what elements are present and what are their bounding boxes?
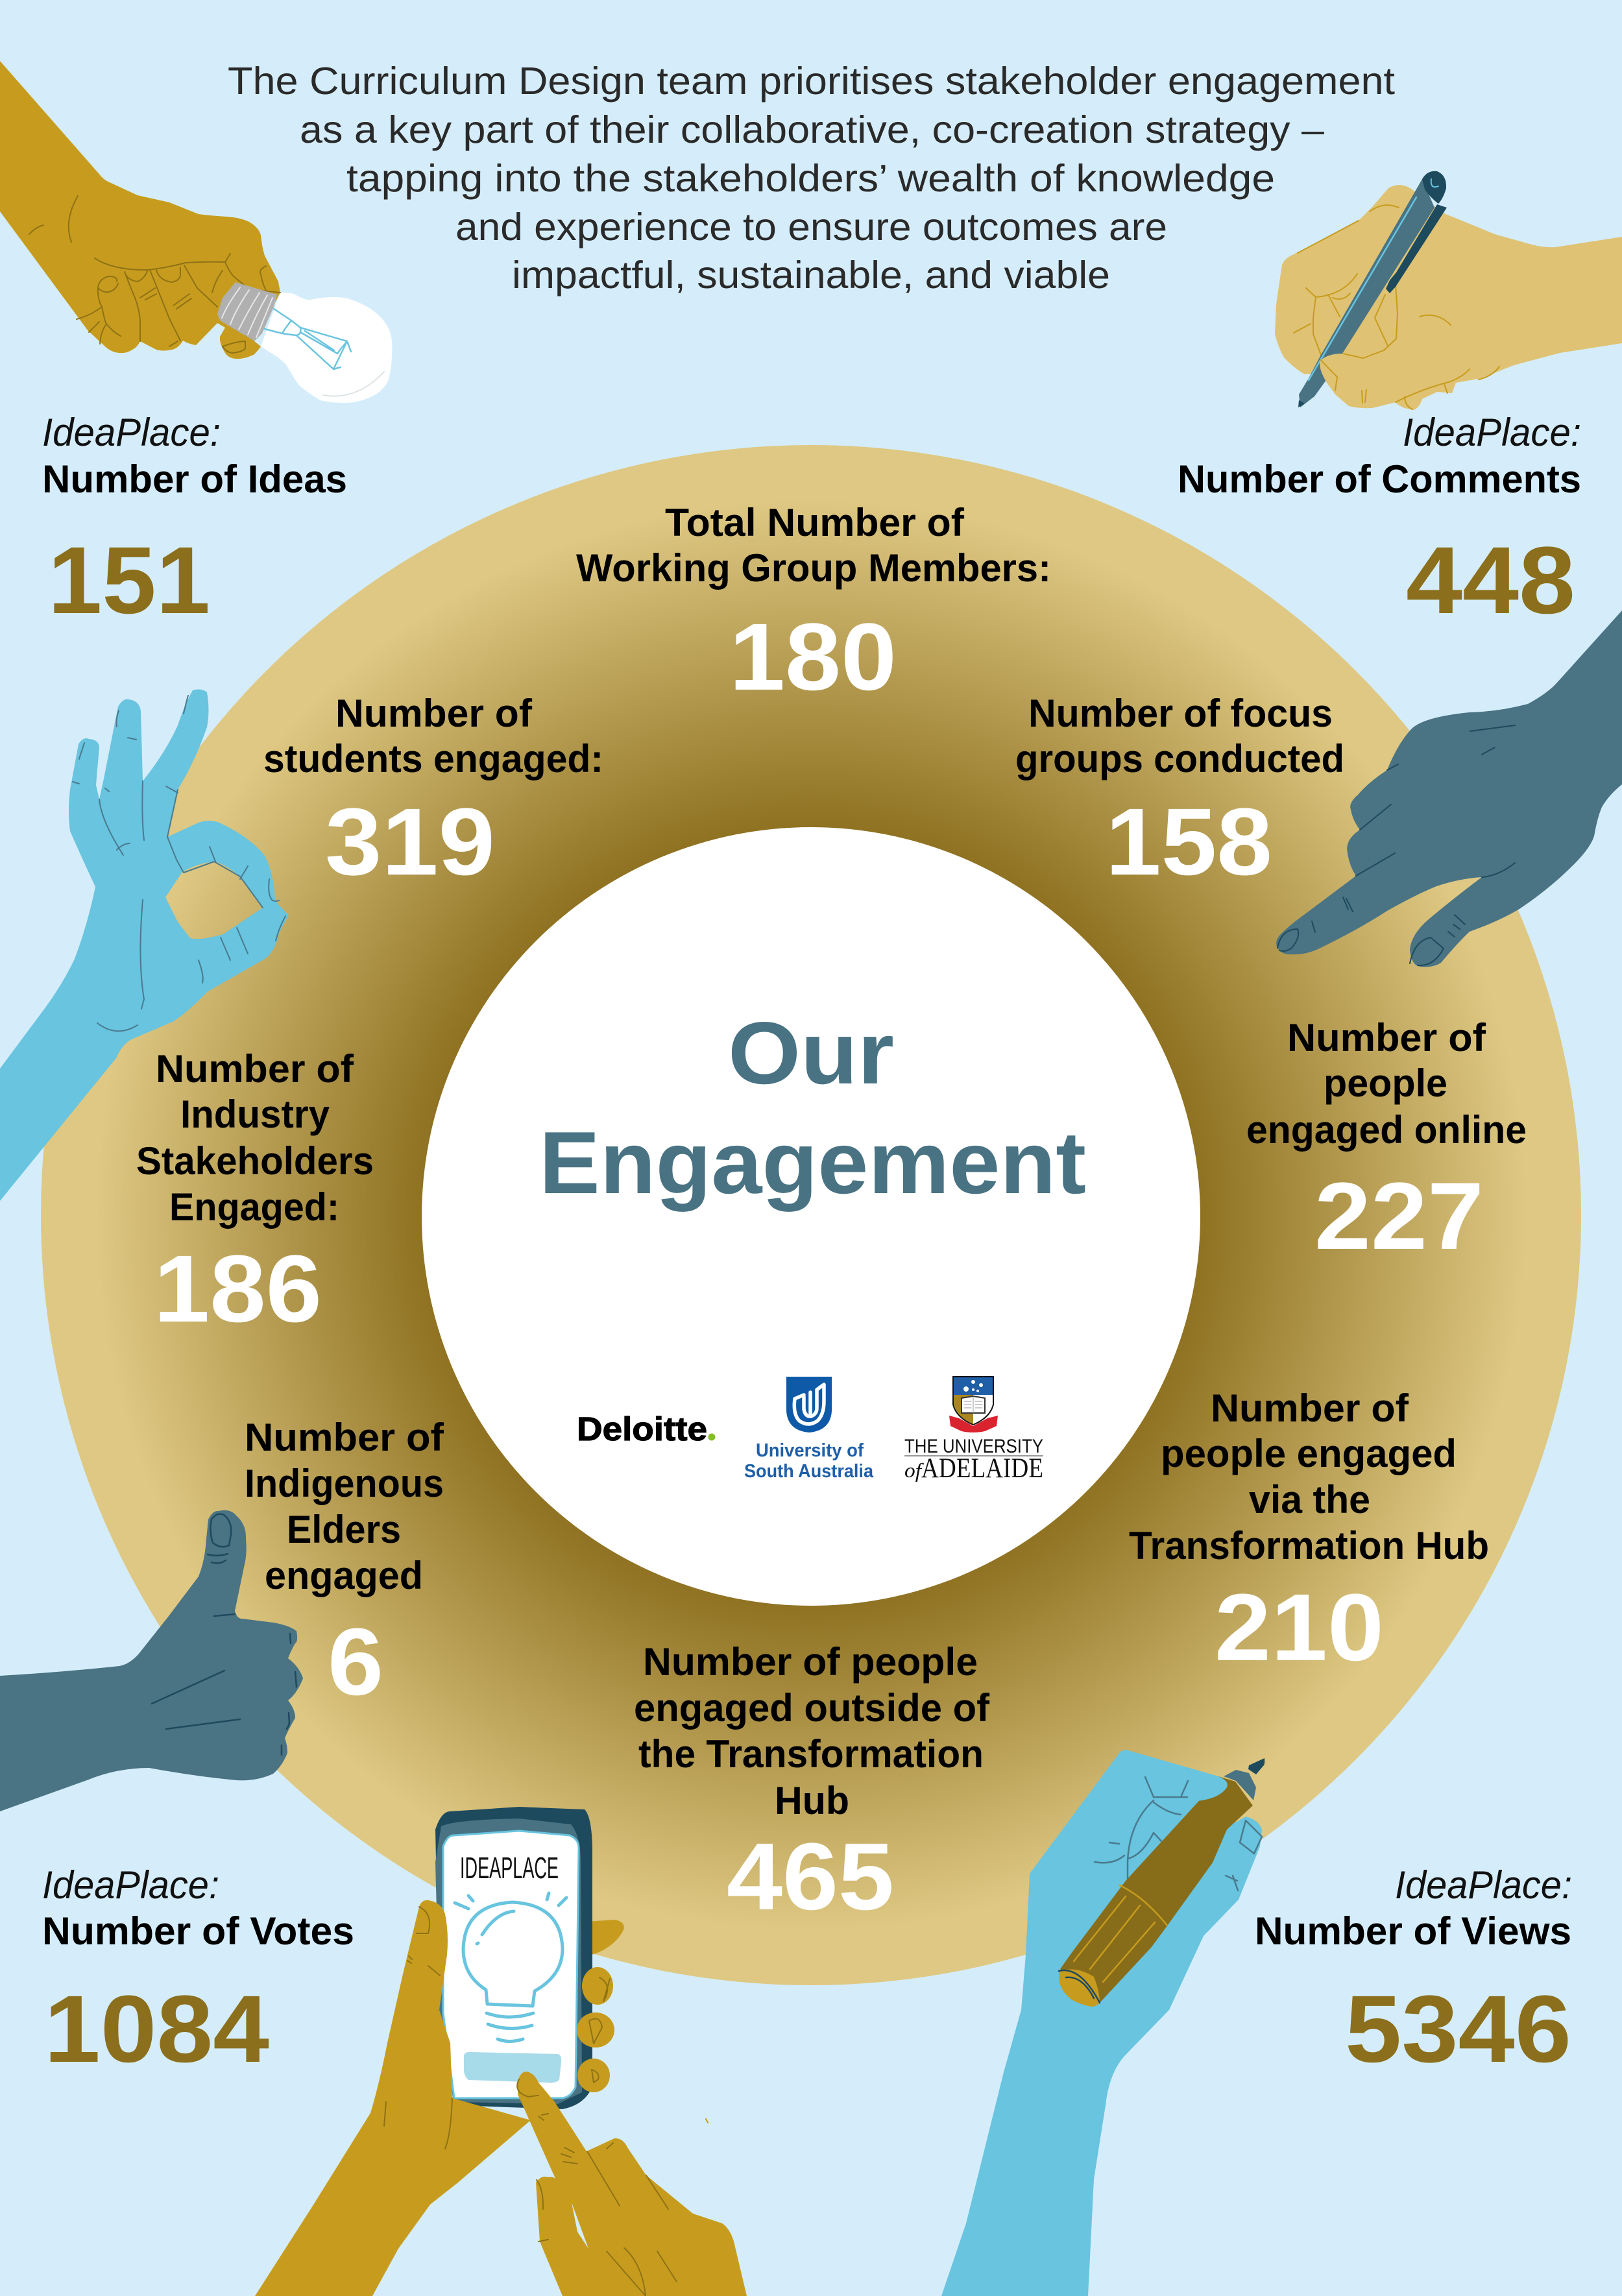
- intro text: [228, 60, 1395, 296]
- stat: IdeaPlace number of votes: IdeaPlace:: [42, 1863, 219, 1907]
- stat: Indigenous Elders: Number of: [245, 1416, 444, 1459]
- intro text: The Curriculum Design team prioritises stakeholder engagement: [228, 60, 1395, 103]
- stat: people engaged online: people: [1324, 1061, 1447, 1105]
- right hand: [518, 2072, 747, 2296]
- stat: industry stakeholders: [136, 1047, 374, 1342]
- stat: focus groups conducted: Number of focus: [1028, 692, 1333, 735]
- stat: IdeaPlace number of ideas: IdeaPlace:: [42, 411, 221, 454]
- logo: University of Adelaide: [904, 1377, 1043, 1484]
- stat: IdeaPlace number of ideas: 151: [48, 527, 210, 634]
- stat: working group members: Working Group Members:: [576, 546, 1051, 590]
- stat: people engaged online: engaged online: [1246, 1108, 1527, 1152]
- stat: students engaged: Number of: [335, 692, 533, 735]
- title: [539, 1004, 1086, 1212]
- stat: IdeaPlace number of views: IdeaPlace:: [1395, 1863, 1572, 1907]
- stat: industry stakeholders: Engaged:: [169, 1185, 339, 1229]
- stat: Transformation Hub: 210: [1215, 1575, 1384, 1681]
- stat: Transformation Hub: Transformation Hub: [1129, 1524, 1489, 1567]
- stat: IdeaPlace number of comments: [1178, 411, 1581, 634]
- intro text: and experience to ensure outcomes are: [455, 206, 1167, 248]
- logo: Deloitte: Deloitte: [577, 1410, 707, 1447]
- stat: industry stakeholders: 186: [154, 1236, 322, 1342]
- icon: blue hand holding marker: [941, 1750, 1265, 2296]
- icon: blue hand making OK sign: [0, 690, 289, 1201]
- stat: people engaged online: 227: [1314, 1163, 1484, 1270]
- stat: Indigenous Elders: Indigenous: [245, 1462, 444, 1505]
- stat: IdeaPlace number of comments: IdeaPlace:: [1403, 411, 1581, 454]
- stat: IdeaPlace number of comments: Number of Comments: [1178, 457, 1581, 501]
- bulb drawing: [455, 1893, 566, 2041]
- stat: outside Transformation Hub: [634, 1640, 990, 1930]
- stat: outside Transformation Hub: 465: [727, 1824, 894, 1930]
- app button: [464, 2052, 561, 2083]
- stat: working group members: [576, 501, 1051, 710]
- icon: gold hand holding light bulb: [0, 61, 392, 403]
- stat: students engaged: students engaged:: [263, 737, 603, 780]
- stat: IdeaPlace number of views: [1255, 1863, 1572, 2083]
- stat: Indigenous Elders: Elders: [287, 1508, 401, 1551]
- stat: industry stakeholders: Number of: [156, 1047, 354, 1091]
- stat: IdeaPlace number of ideas: Number of Ideas: [42, 457, 347, 501]
- stat: focus groups conducted: [1015, 692, 1344, 895]
- stat: focus groups conducted: 158: [1106, 789, 1272, 895]
- stat: working group members: 180: [729, 604, 897, 710]
- stat: IdeaPlace number of votes: 1084: [44, 1976, 269, 2083]
- stat: outside Transformation Hub: Number of people: [643, 1640, 978, 1684]
- stat: Transformation Hub: people engaged: [1161, 1432, 1457, 1475]
- phone screen: [443, 1831, 579, 2098]
- stat: focus groups conducted: groups conducted: [1015, 737, 1344, 780]
- stat: IdeaPlace number of views: 5346: [1345, 1976, 1571, 2083]
- stat: Indigenous Elders: 6: [328, 1609, 383, 1715]
- icon: dark teal thumbs up: [0, 1510, 303, 1811]
- intro text: tapping into the stakeholders’ wealth of knowledge: [346, 157, 1275, 200]
- icon: hands holding phone with IdeaPlace app: [255, 1807, 747, 2296]
- stat: Indigenous Elders: [245, 1416, 444, 1715]
- gold ring: [41, 445, 1581, 1985]
- stat: people engaged online: Number of: [1287, 1016, 1486, 1059]
- logo: University of South Australia: [744, 1377, 874, 1482]
- stat: IdeaPlace number of votes: Number of Votes: [42, 1909, 354, 1953]
- centre white circle: [422, 827, 1200, 1606]
- speck: [706, 2119, 708, 2123]
- logo: University of Adelaide: ADELAIDE: [921, 1453, 1043, 1484]
- title: Engagement: [539, 1113, 1086, 1212]
- stat: IdeaPlace number of comments: 448: [1406, 527, 1575, 634]
- stat: students engaged: [263, 692, 603, 895]
- intro text: as a key part of their collaborative, co-creation strategy –: [300, 108, 1324, 151]
- logo: University of South Australia: South Australia: [744, 1461, 874, 1482]
- stat: industry stakeholders: Stakeholders: [136, 1139, 374, 1183]
- stat: outside Transformation Hub: the Transformation: [638, 1732, 984, 1776]
- logo: University of Adelaide: of: [904, 1458, 924, 1482]
- logo: University of Adelaide: THE UNIVERSITY: [904, 1436, 1043, 1457]
- stat: IdeaPlace number of ideas: [42, 411, 347, 634]
- stat: Transformation Hub: Number of: [1211, 1386, 1409, 1430]
- title: Our: [728, 1004, 894, 1102]
- stat: IdeaPlace number of votes: [42, 1863, 354, 2083]
- icon: pale hand writing with pen: [1275, 171, 1622, 410]
- intro text: impactful, sustainable, and viable: [512, 254, 1110, 296]
- stat: working group members: Total Number of: [665, 501, 965, 544]
- handwritten app title: IDEAPLACE: [460, 1851, 559, 1885]
- stat: Transformation Hub: [1129, 1386, 1489, 1681]
- stat: IdeaPlace number of views: Number of Views: [1255, 1909, 1571, 1953]
- left hand: [255, 1900, 531, 2296]
- stat: outside Transformation Hub: Hub: [775, 1779, 849, 1822]
- stat: students engaged: 319: [325, 789, 495, 895]
- stat: Indigenous Elders: engaged: [265, 1554, 423, 1597]
- icon: dark teal hand pointing: [1276, 610, 1622, 967]
- stat: outside Transformation Hub: engaged outside of: [634, 1686, 990, 1730]
- stat: people engaged online: [1246, 1016, 1527, 1270]
- stat: Transformation Hub: via the: [1249, 1478, 1370, 1521]
- stat: industry stakeholders: Industry: [180, 1093, 330, 1136]
- logo: University of South Australia: University of: [756, 1440, 864, 1461]
- fingertips: [577, 1967, 614, 2092]
